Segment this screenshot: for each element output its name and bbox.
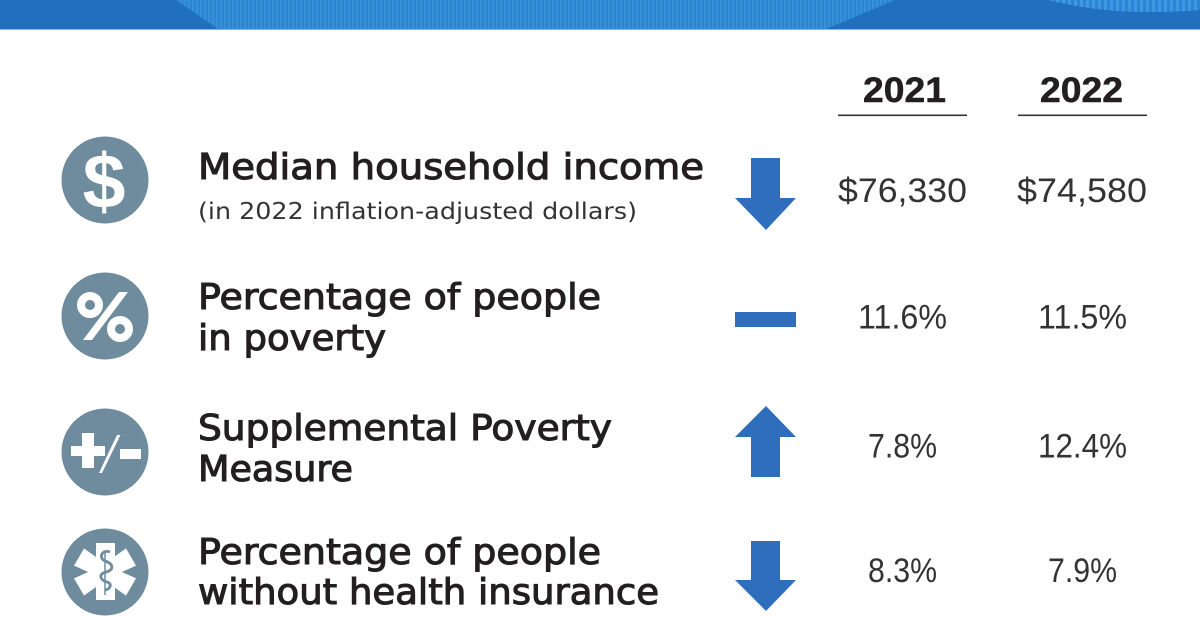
heading: 2021	[838, 71, 967, 116]
row: people in poverty	[62, 272, 1127, 360]
heading: 2022: 2022	[1040, 71, 1123, 110]
value 2022: $74,580	[1017, 172, 1147, 210]
icon: plus minus	[62, 408, 148, 496]
arrow: down	[735, 541, 796, 611]
arrow: up	[735, 406, 796, 477]
label: supplemental poverty measure: Measure	[198, 449, 353, 490]
heading: 2021: 2021	[863, 71, 946, 110]
icon: percent	[62, 272, 148, 360]
label: percentage of people in poverty	[198, 277, 601, 359]
label: percentage of people in poverty: Percentage of people	[198, 277, 601, 318]
icon: dollar	[62, 136, 148, 225]
value 2021: $76,330	[838, 172, 967, 210]
note: inflation-adjusted: (in 2022 inflation-adjusted dollars)	[198, 199, 637, 225]
value 2021: 8.3%	[868, 552, 937, 590]
label: percentage of people without health insurance	[198, 532, 659, 613]
value 2021: 11.6%	[858, 298, 947, 336]
value 2022: 11.5%	[1038, 298, 1127, 336]
row: supplemental poverty measure	[62, 406, 1127, 496]
label: percentage of people in poverty: in poverty	[198, 318, 386, 359]
label: median household income: Median household income	[198, 147, 704, 188]
column headings	[838, 71, 1147, 116]
icon: dollar: $	[83, 139, 125, 225]
value 2021: 7.8%	[868, 428, 937, 466]
heading: 2022	[1018, 71, 1147, 116]
label: percentage of people without health insurance: Percentage of people	[198, 532, 601, 573]
arrow: down	[735, 158, 796, 230]
marker: unchanged	[735, 312, 796, 327]
label: percentage of people without health insurance: without health insurance	[198, 572, 659, 613]
icon: star of life	[62, 528, 148, 616]
value 2022: 12.4%	[1038, 428, 1127, 466]
value 2022: 7.9%	[1048, 552, 1117, 590]
label: supplemental poverty measure	[198, 408, 612, 490]
header band	[0, 0, 1200, 30]
row: median household income	[62, 136, 1147, 230]
row: without health insurance	[62, 528, 1117, 616]
label: supplemental poverty measure: Supplemental Poverty	[198, 408, 612, 449]
